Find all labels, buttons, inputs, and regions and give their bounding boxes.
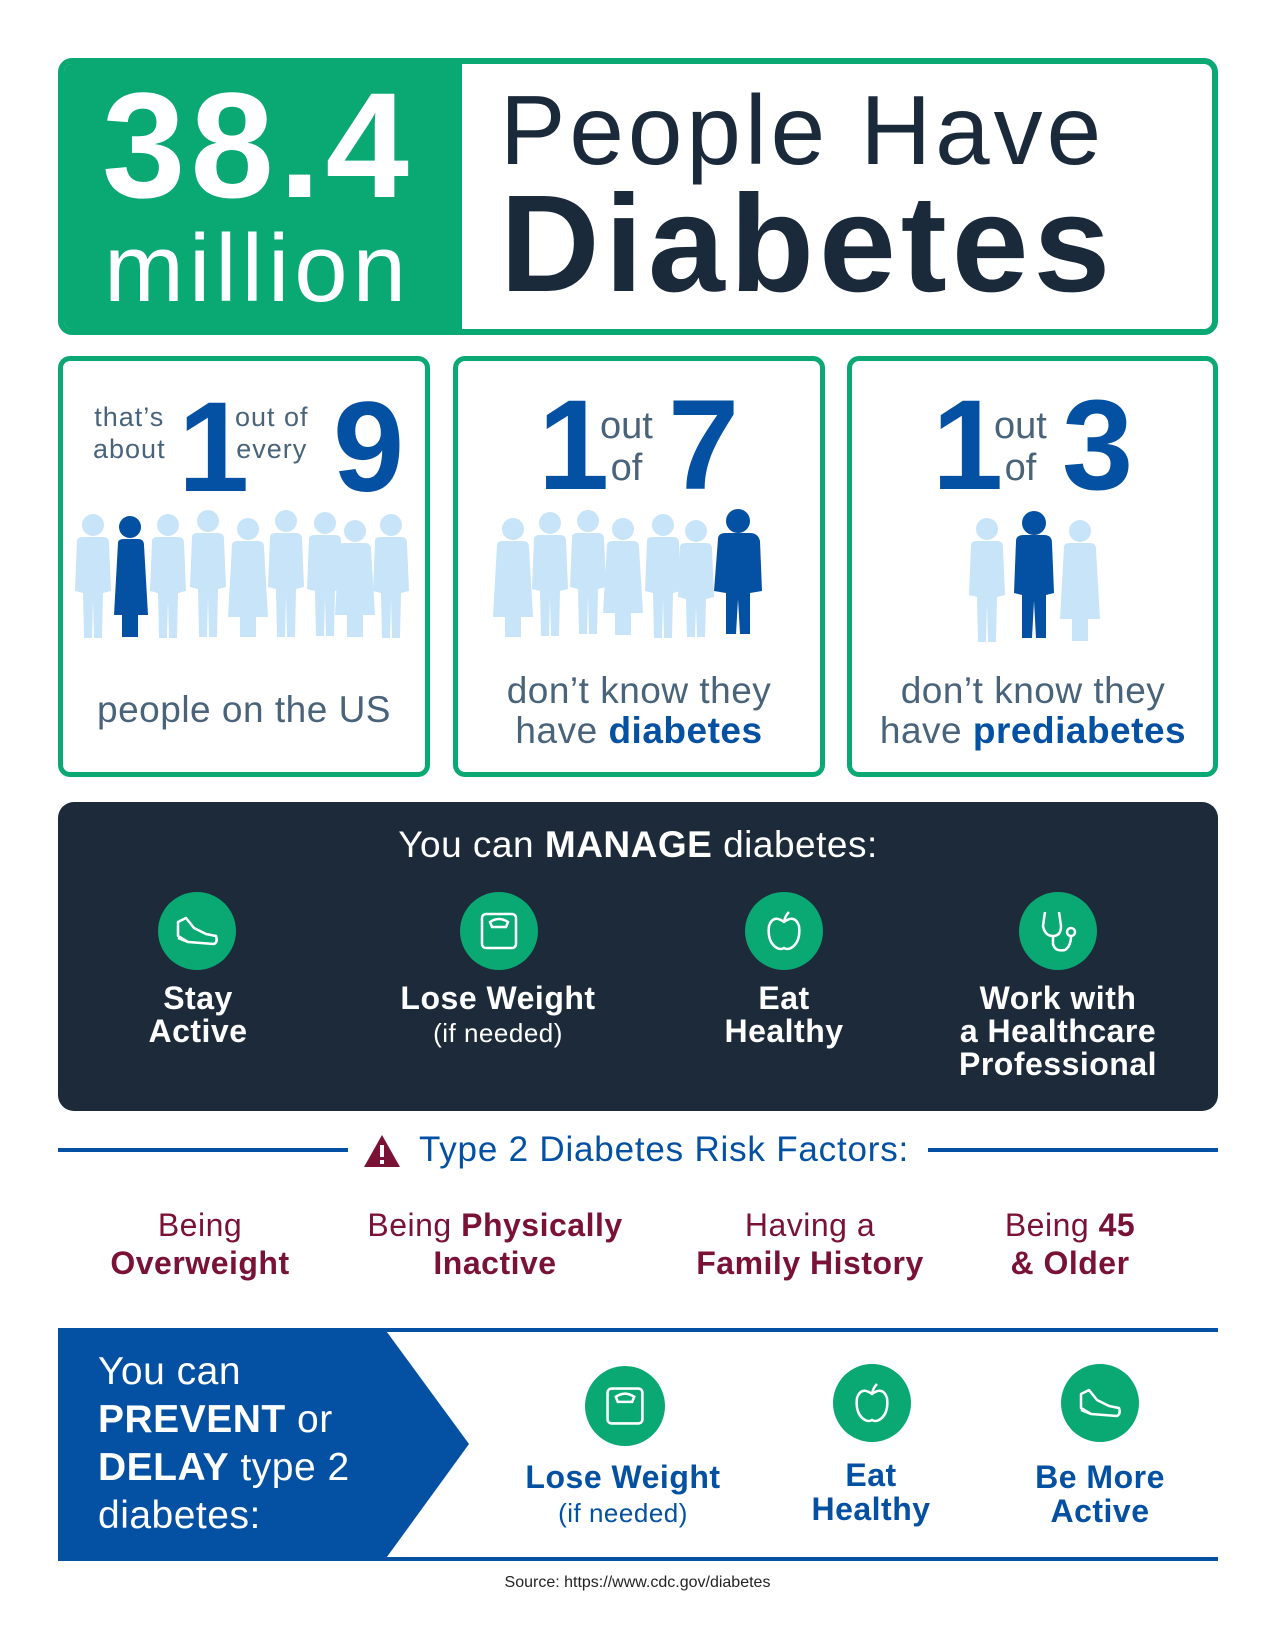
label: Active <box>1050 1493 1150 1529</box>
prevent section <box>58 1328 1218 1561</box>
stat text <box>538 374 739 517</box>
stat text: 1 <box>932 374 1003 517</box>
caption: have diabetes <box>515 710 763 751</box>
risk factor: age: Being 45 <box>1005 1207 1135 1243</box>
label: a Healthcare <box>960 1013 1156 1049</box>
label: Work with <box>980 980 1136 1016</box>
caption: don’t know they <box>901 670 1165 711</box>
icon: shoe <box>1061 1364 1139 1442</box>
icon: scale <box>585 1366 665 1446</box>
heading: You can MANAGE diabetes: <box>398 824 878 865</box>
stat block: 38.4 million: million <box>104 215 411 322</box>
label <box>525 1459 721 1528</box>
source: Source: https://www.cdc.gov/diabetes <box>505 1574 770 1591</box>
label: Healthy <box>811 1491 931 1527</box>
banner text <box>98 1350 350 1537</box>
caption: don’t know they <box>507 670 771 711</box>
label: (if needed) <box>433 1018 563 1048</box>
stat block: 38.4 million: 38.4 <box>102 61 414 229</box>
stat text: 1 <box>538 374 609 517</box>
label <box>400 980 596 1048</box>
icon: apple <box>833 1364 911 1442</box>
icon: warning <box>364 1135 400 1167</box>
stat text: of <box>611 447 642 489</box>
stat text: 9 <box>333 376 404 519</box>
risk factor: overweight <box>110 1207 290 1281</box>
label: Eat <box>758 980 810 1016</box>
stat text: out of <box>235 402 309 432</box>
icon: shoe <box>158 892 236 970</box>
risk factor: overweight: Being <box>158 1207 242 1243</box>
banner text: diabetes: <box>98 1494 261 1537</box>
people silhouettes: 1 of 3 highlighted <box>969 511 1100 642</box>
label <box>724 980 844 1049</box>
title: People Have Diabetes <box>500 75 1115 321</box>
stat text: 7 <box>668 374 739 517</box>
risk factor: age <box>1005 1207 1135 1281</box>
stat text: out <box>600 405 653 447</box>
stat text: out <box>994 405 1047 447</box>
risk factor: family history: Having a <box>745 1207 875 1243</box>
panel: manage diabetes <box>58 802 1218 1111</box>
header box <box>58 58 1218 335</box>
label: Be More <box>1035 1459 1165 1495</box>
stat text: 1 <box>178 376 249 519</box>
label <box>959 980 1157 1082</box>
risk factors heading <box>58 1130 1218 1169</box>
caption <box>507 670 771 751</box>
stat text: about <box>93 434 166 464</box>
stat block: 38.4 million <box>64 64 462 329</box>
banner text: PREVENT or <box>98 1398 333 1441</box>
label <box>148 980 248 1049</box>
label: Stay <box>163 980 233 1016</box>
icon: apple <box>745 892 823 970</box>
arrow banner <box>58 1332 469 1557</box>
caption: have prediabetes <box>880 710 1186 751</box>
risk factor: family history <box>696 1207 924 1281</box>
label: Lose Weight <box>525 1459 721 1495</box>
panel: 1 out of 3 <box>847 356 1218 777</box>
title: People Have Diabetes: People Have <box>500 75 1105 185</box>
risk factor: age: & Older <box>1010 1245 1130 1281</box>
stat text <box>93 376 404 519</box>
people silhouettes: 1 of 7 highlighted <box>493 509 762 638</box>
banner text: You can <box>98 1350 241 1393</box>
caption <box>880 670 1186 751</box>
label: Healthy <box>724 1013 844 1049</box>
label: Professional <box>959 1046 1157 1082</box>
banner text: DELAY type 2 <box>98 1446 350 1489</box>
risk factor: inactive: Being Physically <box>367 1207 623 1243</box>
risk factor: family history: Family History <box>696 1245 924 1281</box>
label <box>1035 1459 1165 1529</box>
panel: 1 out of 9 <box>58 356 430 777</box>
heading text: Type 2 Diabetes Risk Factors: <box>419 1130 909 1169</box>
stat text: 3 <box>1062 374 1133 517</box>
label: Lose Weight <box>400 980 596 1016</box>
icon: scale <box>460 892 538 970</box>
risk factor: overweight: Overweight <box>110 1245 290 1281</box>
icon: stethoscope <box>1019 892 1097 970</box>
stat text: of <box>1005 447 1036 489</box>
label: (if needed) <box>558 1498 688 1528</box>
stat text <box>932 374 1133 517</box>
label: Eat <box>845 1457 897 1493</box>
stat text: that’s <box>94 402 164 432</box>
risk factor: inactive: Inactive <box>433 1245 557 1281</box>
caption: people on the US <box>97 689 391 730</box>
panel: 1 out of 7 <box>453 356 825 777</box>
label: Active <box>148 1013 248 1049</box>
stat text: every <box>236 434 307 464</box>
title: People Have Diabetes: Diabetes <box>500 167 1115 321</box>
label <box>811 1457 931 1527</box>
people silhouettes: 1 of 9 highlighted <box>75 510 409 638</box>
risk factor: inactive <box>367 1207 623 1281</box>
